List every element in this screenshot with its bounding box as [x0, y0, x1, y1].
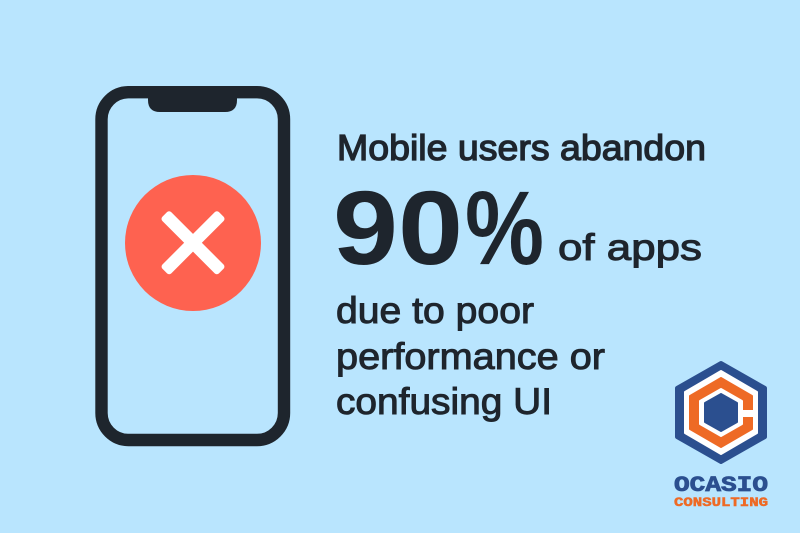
- icon: red error circle: [125, 175, 261, 311]
- text: statistic message: [333, 127, 706, 422]
- logo wordmark: CONSULTING: CONSULTING: [674, 496, 768, 510]
- text: reason line two: performance or: [336, 336, 605, 377]
- text: 90 percent figure: 90: [333, 170, 463, 287]
- text: intro line: Mobile users abandon: [337, 127, 706, 168]
- text: 90 percent figure: [333, 170, 544, 287]
- phone body: [102, 92, 284, 440]
- text: 90 percent figure: %: [465, 170, 544, 287]
- logo hexagon mark: [677, 363, 765, 462]
- text: reason line one: due to poor: [336, 290, 534, 331]
- icon: smartphone with error symbol: [102, 92, 284, 440]
- logo: Ocasio Consulting: [674, 363, 768, 510]
- text: reason line three: confusing UI: [336, 381, 552, 422]
- logo wordmark: OCASIO: OCASIO: [674, 473, 768, 498]
- text: of apps: of apps: [558, 227, 702, 268]
- phone notch: [148, 97, 237, 112]
